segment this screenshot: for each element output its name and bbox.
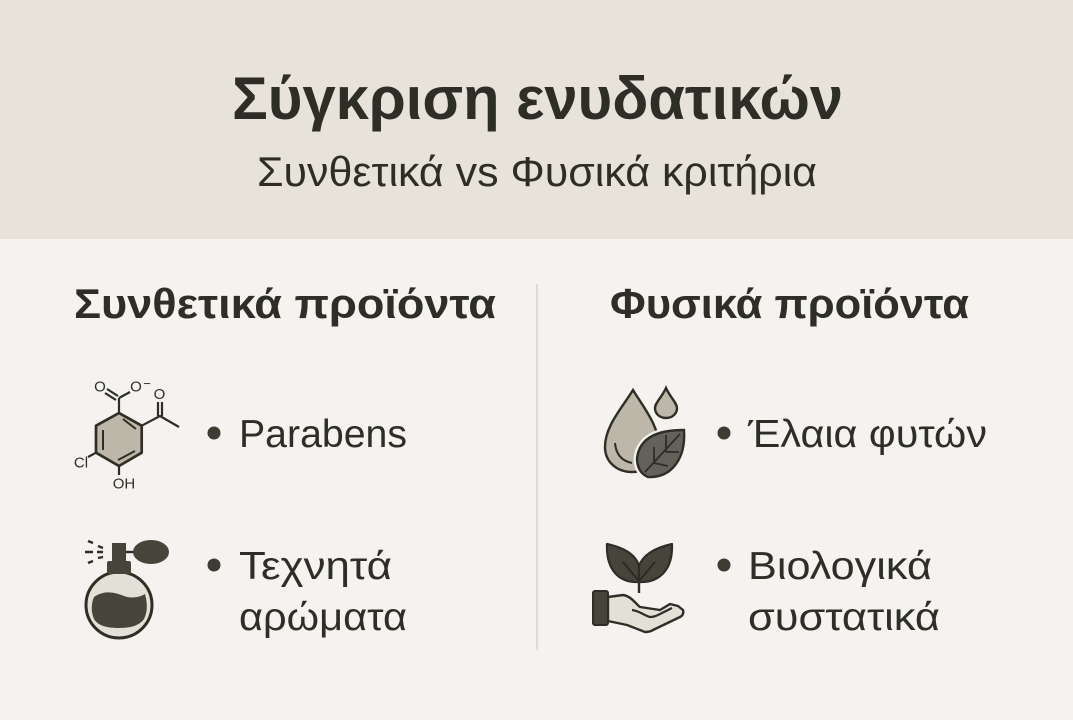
bullet: artificial fragrances — [208, 558, 220, 572]
label: Parabens: Parabens — [239, 413, 407, 456]
header band — [0, 0, 1073, 239]
label: organic ingredients: συστατικά — [748, 596, 940, 639]
heading: synthetic products: Συνθετικά προϊόντα — [74, 280, 496, 327]
icon: oil drops and leaf — [605, 388, 684, 477]
bullet: organic ingredients — [718, 558, 730, 572]
icon: molecule: OH — [113, 476, 135, 492]
icon: hand with plant — [593, 544, 683, 632]
label: plant oils: Έλαια φυτών — [747, 413, 987, 456]
panel: synthetic products — [74, 280, 496, 639]
label: organic ingredients: Βιολογικά — [748, 545, 932, 588]
panel: natural products — [593, 280, 987, 639]
bullet: Parabens — [208, 426, 220, 440]
icon: molecule: O — [130, 378, 142, 396]
label: organic ingredients — [748, 545, 940, 639]
icon: molecule: O — [154, 386, 165, 403]
label: artificial fragrances: αρώματα — [239, 596, 407, 639]
title: Σύγκριση ενυδατικών — [232, 65, 843, 132]
icon: molecule: O — [94, 378, 106, 396]
bullet: plant oils — [718, 426, 730, 440]
icon: molecule — [74, 376, 179, 492]
subtitle: Συνθετικά vs Φυσικά κριτήρια — [257, 148, 817, 195]
label: artificial fragrances — [239, 545, 407, 639]
icon: perfume bottle — [85, 540, 169, 638]
icon: molecule: Cl — [74, 454, 88, 472]
icon: molecule: − — [143, 376, 151, 391]
label: artificial fragrances: Τεχνητά — [239, 545, 392, 588]
heading: natural products: Φυσικά προϊόντα — [610, 280, 969, 327]
